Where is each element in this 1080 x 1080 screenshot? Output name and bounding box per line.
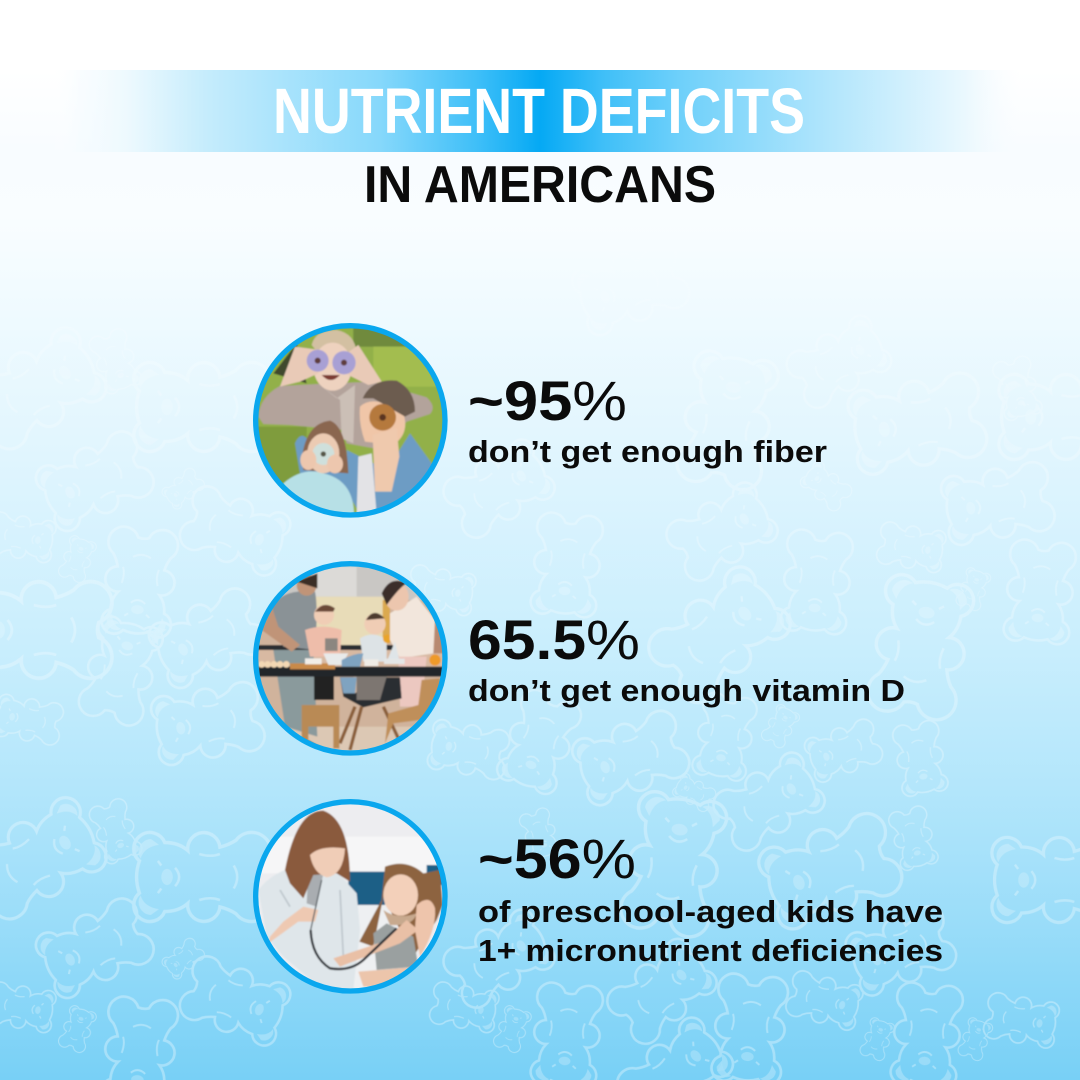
label: preschool deficiencies [478, 894, 943, 968]
title banner [50, 70, 1020, 152]
stat: ~95%: ~95% [468, 369, 627, 432]
photo: family with donuts [250, 320, 451, 521]
label: preschool deficiencies: of preschool-aged kids have [478, 894, 943, 929]
stat: 65.5%: 65.5% [468, 608, 640, 671]
label: fiber: don’t get enough fiber [468, 434, 827, 469]
title: nutrient deficits: NUTRIENT DEFICITS [273, 75, 805, 147]
photo: doctor and child [250, 797, 451, 997]
gummy bear background pattern [0, 483, 1080, 1080]
subtitle: in Americans: IN AMERICANS [364, 156, 716, 214]
photo: family cooking [250, 560, 451, 761]
label: vitamin D: don’t get enough vitamin D [468, 673, 905, 708]
label: preschool deficiencies: 1+ micronutrient deficiencies [478, 933, 943, 968]
stat: ~56%: ~56% [478, 827, 636, 890]
